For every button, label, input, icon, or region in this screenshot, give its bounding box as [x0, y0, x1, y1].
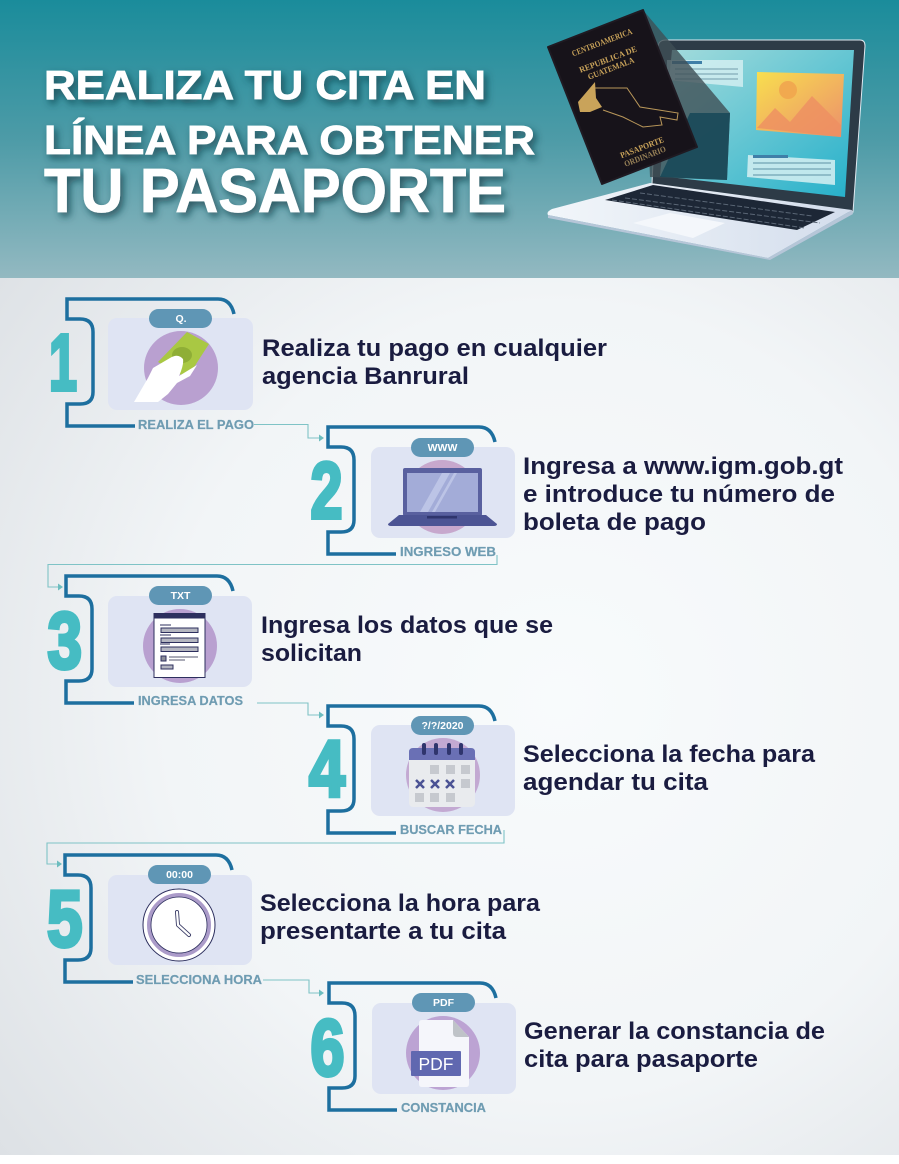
passport gold lettering — [570, 26, 668, 169]
step 3: TXT — [171, 590, 191, 602]
step 4: ?/?/2020 — [421, 720, 464, 732]
step 2: e introduce tu número de — [523, 481, 835, 508]
step 3 — [48, 576, 553, 708]
step 2 — [310, 427, 843, 559]
step 2: Ingresa a www.igm.gob.gt — [523, 453, 843, 480]
connector arrow 4 to 5 — [47, 830, 504, 868]
step 1: agencia Banrural — [262, 363, 469, 390]
step 6 — [310, 983, 825, 1115]
step 2: WWW — [428, 442, 457, 454]
passport — [548, 10, 697, 184]
connector arrow 5 to 6 — [263, 980, 324, 996]
step 3: INGRESA DATOS — [138, 694, 243, 708]
laptop screen — [652, 40, 865, 212]
passport map of Central America — [578, 82, 678, 127]
passport gold lettering: ORDINARIO — [623, 144, 668, 169]
step 2: INGRESO WEB — [400, 545, 496, 559]
step 5: presentarte a tu cita — [260, 918, 507, 945]
illustration: laptop with passport — [548, 10, 865, 260]
passport gold lettering: REPUBLICA DE — [578, 43, 638, 75]
step 5: 00:00 — [166, 869, 193, 881]
steps background panel — [0, 278, 899, 1155]
step 6: CONSTANCIA — [401, 1101, 486, 1115]
passport gold lettering: PASAPORTE — [619, 134, 665, 160]
connector arrow 3 to 4 — [257, 703, 324, 718]
icon: clock — [143, 889, 215, 961]
title: REALIZA TU CITA EN — [44, 62, 486, 108]
step 5: 5 — [47, 874, 82, 963]
step 5: SELECCIONA HORA — [136, 973, 262, 987]
step 1: Realiza tu pago en cualquier — [262, 335, 607, 362]
icon: laptop — [388, 460, 497, 534]
connector arrow 2 to 3 — [48, 555, 497, 590]
icon: calendar — [406, 738, 480, 812]
step 3: Ingresa los datos que se — [261, 612, 553, 639]
step 1 — [49, 299, 607, 432]
passport shadow on screen — [643, 10, 730, 180]
passport gold lettering: CENTROAMERICA — [570, 26, 634, 58]
step 2: 2 — [310, 446, 342, 535]
step 3: 3 — [48, 596, 82, 685]
icon: PDF file — [406, 1016, 480, 1090]
step 4 — [309, 706, 816, 837]
step 6: PDF — [433, 997, 455, 1009]
passport gold lettering: GUATEMALA — [586, 54, 636, 82]
icon: PDF file: PDF — [418, 1054, 454, 1074]
step 1: REALIZA EL PAGO — [138, 418, 254, 432]
title: LÍNEA PARA OBTENER — [44, 117, 535, 163]
header band — [0, 0, 899, 278]
step 4: 4 — [309, 724, 345, 813]
step 6: cita para pasaporte — [524, 1046, 758, 1073]
step 1: 1 — [49, 318, 77, 407]
step 1: Q. — [175, 313, 187, 325]
step 4: Selecciona la fecha para — [523, 741, 816, 768]
laptop base — [548, 183, 853, 260]
step 4: agendar tu cita — [523, 769, 709, 796]
title — [44, 62, 535, 226]
icon: form document — [143, 609, 217, 683]
icon: hand with money — [134, 331, 218, 405]
step 4: BUSCAR FECHA — [400, 823, 502, 837]
step 6: Generar la constancia de — [524, 1018, 825, 1045]
step 6: 6 — [310, 1003, 344, 1092]
connector arrow 1 to 2 — [254, 424, 324, 442]
step 5: Selecciona la hora para — [260, 890, 541, 917]
step 5 — [47, 855, 541, 987]
title: TU PASAPORTE — [44, 157, 506, 226]
step 3: solicitan — [261, 640, 362, 667]
step 2: boleta de pago — [523, 509, 706, 536]
